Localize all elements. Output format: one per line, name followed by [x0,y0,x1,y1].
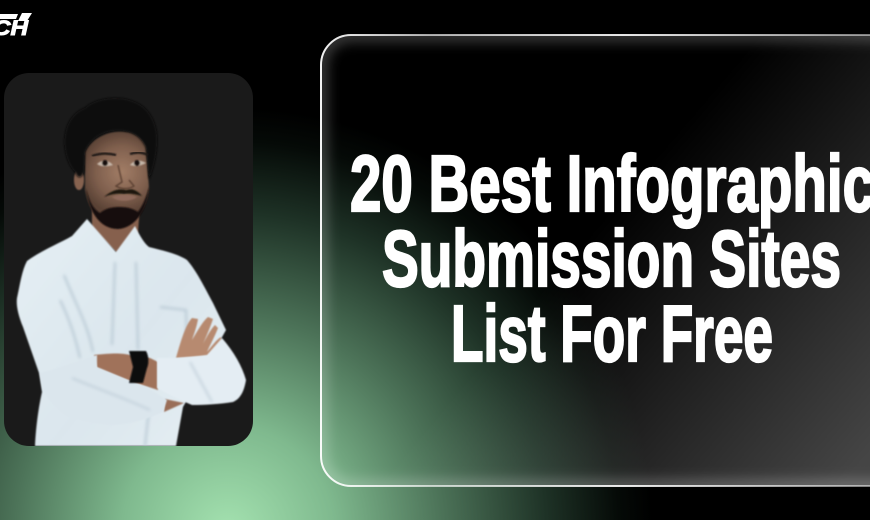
person [17,98,246,446]
palm and fingers [176,317,222,358]
face [84,131,150,214]
right sleeve [157,338,246,405]
lower hand [164,399,184,412]
hair [65,98,157,180]
card background [4,73,253,446]
title [350,139,870,378]
lips [112,195,137,201]
eyes [97,160,146,166]
glass panel [321,35,870,486]
moustache [104,189,142,197]
watch [129,351,148,383]
upper forearm [94,354,158,390]
sleeve folds [72,362,212,410]
beard [86,186,149,229]
ear [74,170,84,190]
shirt body [17,219,226,446]
logo fragment [0,13,32,40]
panel inner glow [321,35,870,486]
shirt folds [60,262,187,446]
eyebrows [92,153,148,156]
nose [116,165,134,189]
left sleeve [40,355,167,425]
neck [91,210,140,252]
panel border [321,35,870,486]
hand [176,317,222,358]
portrait card [4,73,253,446]
